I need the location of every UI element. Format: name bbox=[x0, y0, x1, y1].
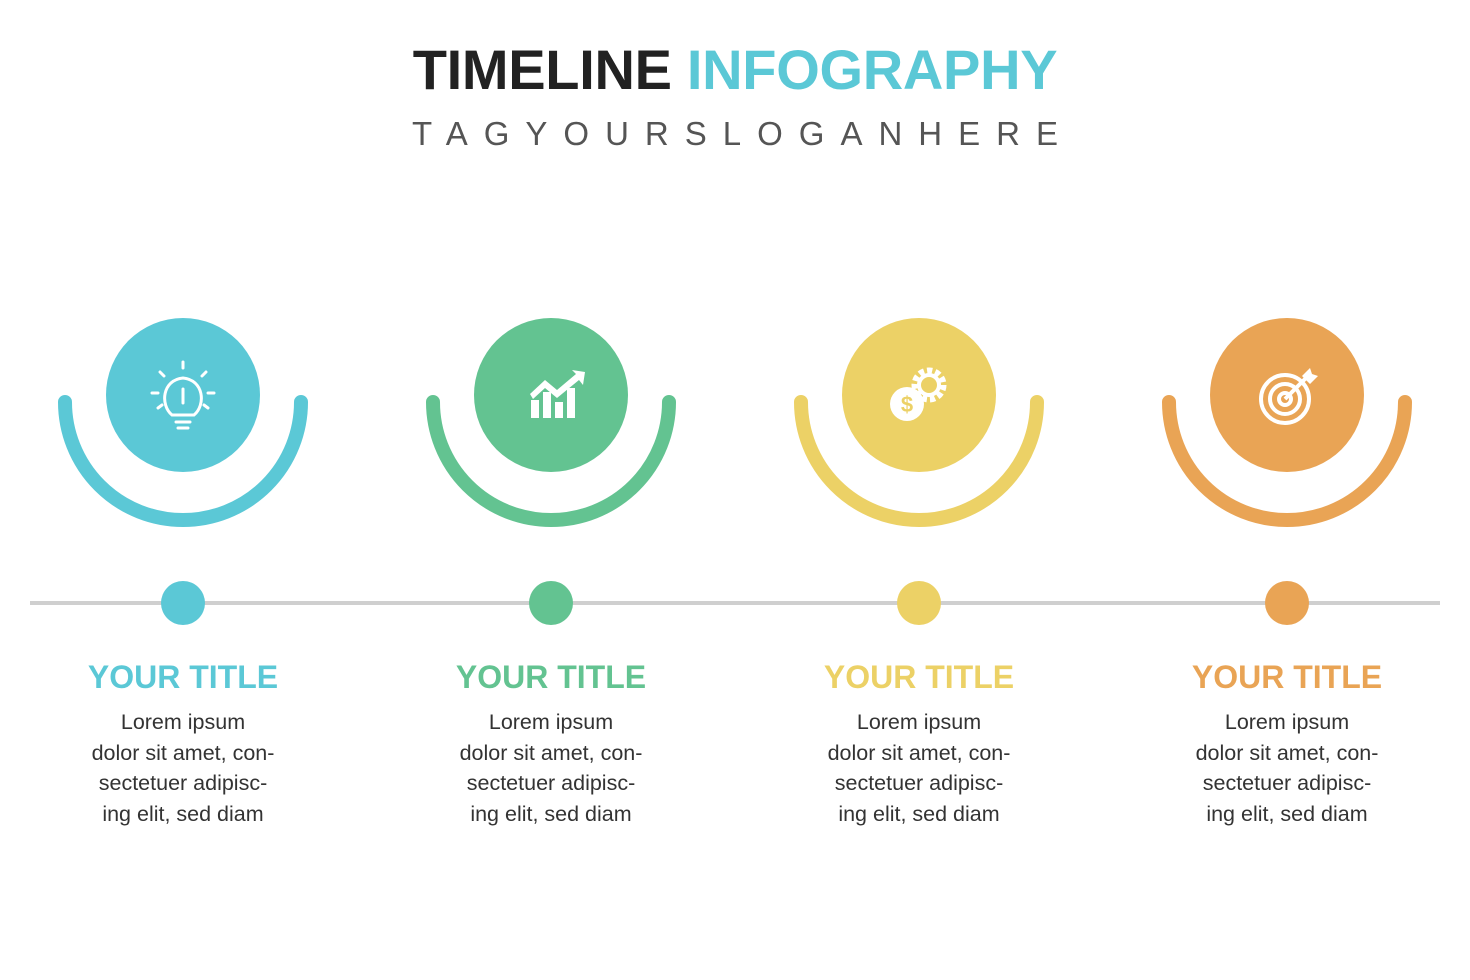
text 2 bbox=[460, 710, 642, 826]
title 4: YOUR TITLE bbox=[1192, 659, 1382, 695]
text 4: Lorem ipsum bbox=[1225, 710, 1349, 734]
step 1 bbox=[65, 318, 301, 520]
step 4 bbox=[1169, 318, 1405, 520]
title: TIMELINE INFOGRAPHY bbox=[413, 38, 1057, 101]
text 2: dolor sit amet, con- bbox=[460, 740, 642, 764]
text 2: Lorem ipsum bbox=[489, 710, 613, 734]
title 3: YOUR TITLE bbox=[824, 659, 1014, 695]
text 1: ing elit, sed diam bbox=[102, 802, 264, 826]
title 2: YOUR TITLE bbox=[456, 659, 646, 695]
slogan: TAGYOURSLOGANHERE bbox=[412, 115, 1074, 152]
text 1: Lorem ipsum bbox=[121, 710, 245, 734]
text 4 bbox=[1196, 710, 1378, 826]
step 3 bbox=[801, 318, 1037, 520]
text 1 bbox=[92, 710, 274, 826]
icon: target bbox=[1261, 375, 1309, 423]
icon: growth chart bbox=[530, 370, 585, 418]
text 1: dolor sit amet, con- bbox=[92, 740, 274, 764]
title 1: YOUR TITLE bbox=[88, 659, 278, 695]
text 3: dolor sit amet, con- bbox=[828, 740, 1010, 764]
text 3 bbox=[828, 710, 1010, 826]
text 3: sectetuer adipisc- bbox=[835, 771, 1003, 795]
step 3: $ bbox=[901, 392, 913, 417]
icon: money gear bbox=[915, 371, 943, 399]
text 4: ing elit, sed diam bbox=[1206, 802, 1368, 826]
text 4: sectetuer adipisc- bbox=[1203, 771, 1371, 795]
text 3: Lorem ipsum bbox=[857, 710, 981, 734]
text 2: ing elit, sed diam bbox=[470, 802, 632, 826]
timeline line bbox=[30, 601, 1440, 605]
step 2 bbox=[433, 318, 669, 520]
text 2: sectetuer adipisc- bbox=[467, 771, 635, 795]
text 3: ing elit, sed diam bbox=[838, 802, 1000, 826]
text 4: dolor sit amet, con- bbox=[1196, 740, 1378, 764]
icon: lightbulb bbox=[152, 362, 214, 428]
text 1: sectetuer adipisc- bbox=[99, 771, 267, 795]
